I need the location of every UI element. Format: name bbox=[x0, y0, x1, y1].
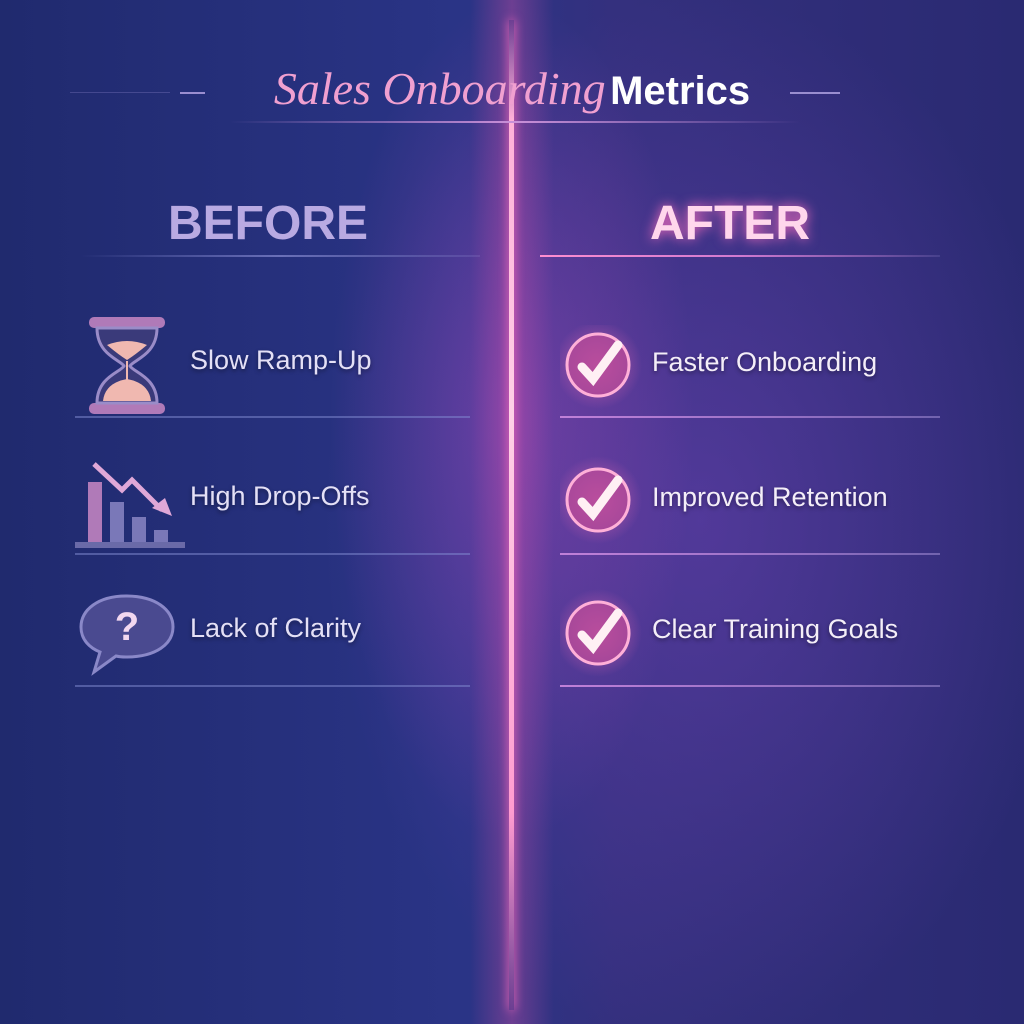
title: Sales Onboarding Metrics bbox=[274, 63, 750, 114]
glow line bbox=[470, 0, 554, 1024]
icon: question bubble bbox=[80, 594, 174, 676]
heading: after: AFTER bbox=[650, 197, 810, 250]
text: clear training goals: Clear Training Goals bbox=[652, 614, 898, 644]
text: improved retention: Improved Retention bbox=[652, 482, 888, 512]
heading: before: BEFORE bbox=[168, 197, 368, 250]
icon: hourglass bbox=[89, 317, 165, 414]
text: high drop-offs: High Drop-Offs bbox=[190, 481, 370, 511]
text: lack of clarity: Lack of Clarity bbox=[190, 613, 361, 643]
check icons bbox=[560, 325, 638, 674]
text: faster onboarding: Faster Onboarding bbox=[652, 347, 877, 377]
icon: bar chart down bbox=[75, 462, 185, 548]
icon: question bubble: ? bbox=[115, 605, 139, 649]
text: slow ramp-up: Slow Ramp-Up bbox=[190, 345, 372, 375]
